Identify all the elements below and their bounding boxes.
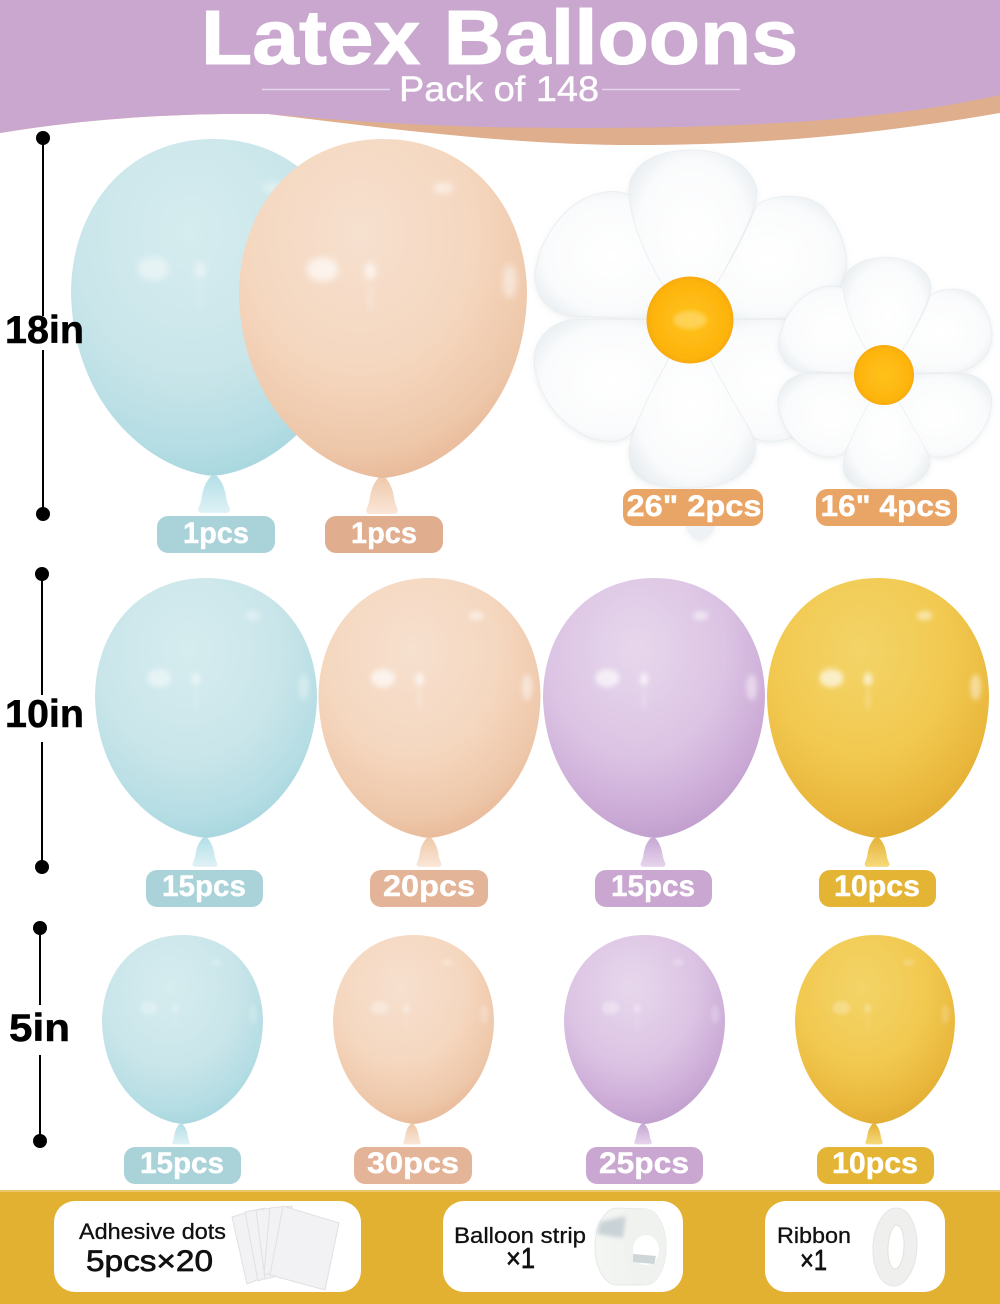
panel: adhesive dots: 5pcs×20 xyxy=(86,1245,213,1278)
balloon: 5in purple xyxy=(564,935,725,1144)
label: 16 inch 4pcs: 16" 4pcs xyxy=(820,490,952,523)
label: 10in yellow 10pcs: 10pcs xyxy=(834,870,920,903)
icon: ribbon roll xyxy=(871,1207,919,1287)
panel: adhesive dots xyxy=(54,1201,361,1292)
icon: adhesive sheets xyxy=(232,1206,339,1290)
panel: ribbon: ×1 xyxy=(800,1245,827,1277)
panel: balloon strip xyxy=(443,1201,683,1292)
subtitle: Pack of 148 xyxy=(399,70,599,109)
balloon: 5in yellow xyxy=(795,935,955,1144)
label: 10in blue 15pcs: 15pcs xyxy=(162,870,246,903)
label: 18in blue 1pcs: 1pcs xyxy=(183,517,249,550)
panel: balloon strip: ×1 xyxy=(506,1243,535,1275)
yellow centre xyxy=(854,345,914,405)
panel: adhesive dots: Adhesive dots xyxy=(79,1219,226,1244)
flower balloon: 26 inch xyxy=(534,150,846,540)
label: 18in blue 1pcs xyxy=(157,516,275,553)
scale: 18in: 18in xyxy=(5,309,84,352)
balloon: 5in peach xyxy=(333,935,494,1144)
label: 10in blue 15pcs xyxy=(146,870,263,907)
scale: 5in: 5in xyxy=(9,1007,70,1050)
balloon: 18in peach xyxy=(239,139,527,514)
label: 26 inch 2pcs: 26" 2pcs xyxy=(626,490,762,523)
label: 5in purple 25pcs: 25pcs xyxy=(599,1147,689,1180)
label: 18in peach 1pcs: 1pcs xyxy=(351,517,417,550)
panel: ribbon xyxy=(765,1201,945,1292)
footer band xyxy=(0,1190,1000,1304)
label: 18in peach 1pcs xyxy=(325,516,443,553)
scale: 5in xyxy=(9,921,70,1148)
balloon: 5in blue xyxy=(102,935,263,1144)
scale: 18in xyxy=(5,131,84,521)
header banner xyxy=(0,0,1000,145)
label: 10in yellow 10pcs xyxy=(819,870,936,907)
label: 5in yellow 10pcs xyxy=(817,1147,934,1184)
icon: balloon strip roll xyxy=(595,1208,666,1285)
label: 5in peach 30pcs: 30pcs xyxy=(367,1147,459,1180)
balloon: 18in blue xyxy=(71,139,355,513)
label: 10in purple 15pcs: 15pcs xyxy=(611,870,695,903)
label: 10in purple 15pcs xyxy=(595,870,712,907)
flower balloon: 16 inch xyxy=(778,258,992,489)
balloon: 10in purple xyxy=(543,578,765,867)
balloon: 10in peach xyxy=(318,578,540,867)
scale: 10in xyxy=(5,567,84,874)
yellow centre xyxy=(646,276,734,364)
label: 5in blue 15pcs xyxy=(124,1147,241,1184)
label: 10in peach 20pcs xyxy=(370,870,488,907)
label: 5in peach 30pcs xyxy=(354,1147,472,1184)
foil tail xyxy=(685,525,716,540)
panel: ribbon: Ribbon xyxy=(777,1223,851,1248)
petals xyxy=(534,150,846,488)
balloon: 10in blue xyxy=(95,578,317,867)
label: 5in purple 25pcs xyxy=(586,1147,703,1184)
panel: balloon strip: Balloon strip xyxy=(454,1223,586,1248)
label: 5in yellow 10pcs: 10pcs xyxy=(832,1147,918,1180)
balloon: 10in yellow xyxy=(767,578,989,867)
label: 5in blue 15pcs: 15pcs xyxy=(140,1147,224,1180)
petals xyxy=(778,258,992,489)
scale: 10in: 10in xyxy=(5,693,84,736)
label: 10in peach 20pcs: 20pcs xyxy=(383,870,475,903)
